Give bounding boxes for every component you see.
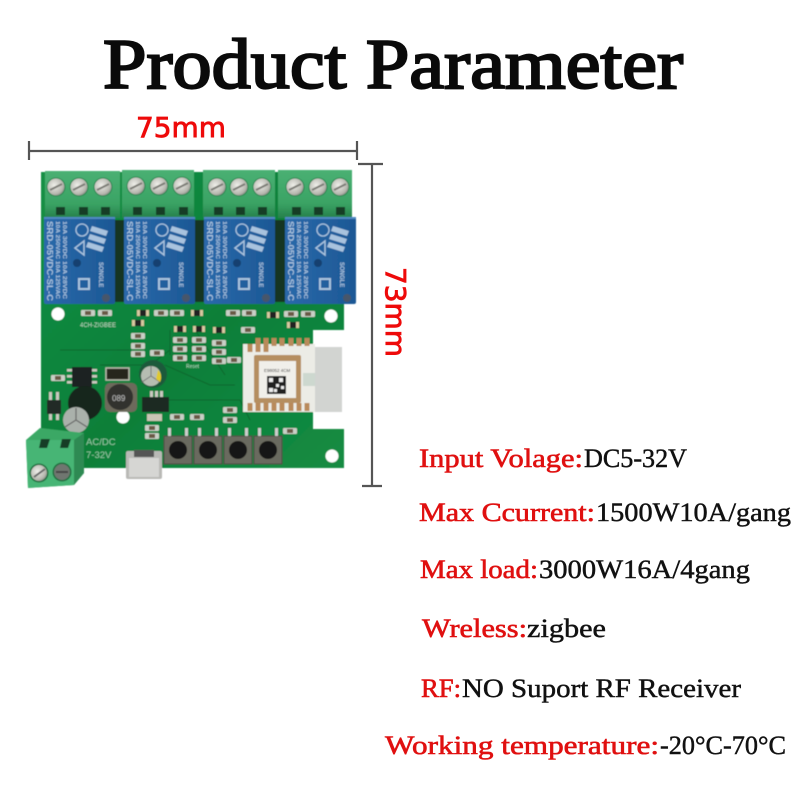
ICs and inductors xyxy=(47,367,169,421)
power terminal block xyxy=(26,428,84,488)
Zigbee module xyxy=(243,338,342,412)
PCB silk text: 4CH-ZIGBEE xyxy=(80,323,116,329)
spec: max current: Max Ccurrent: xyxy=(419,498,595,527)
silk voltage label: AC/DC xyxy=(86,437,116,448)
spec: max current xyxy=(419,498,791,527)
width dimension label: 75mm xyxy=(136,111,226,144)
silk voltage label xyxy=(86,437,116,461)
spec: working temperature xyxy=(385,731,786,760)
circuit board photo xyxy=(26,170,356,488)
silk reset label: Reset xyxy=(186,364,200,370)
height dimension arrow xyxy=(358,164,383,486)
ICs and inductors: 089 xyxy=(112,394,126,403)
PCB traces xyxy=(60,330,250,420)
spec: max load xyxy=(420,555,750,584)
spec: working temperature: Working temperature: xyxy=(385,731,659,760)
spec: wireless: zigbee xyxy=(527,614,606,643)
spec: input voltage xyxy=(419,444,687,473)
spec: RF: NO Suport RF Receiver xyxy=(462,674,741,703)
spec: RF: RF: xyxy=(421,674,461,703)
spec: input voltage: Input Volage: xyxy=(419,444,583,473)
title: Product Parameter xyxy=(103,26,683,104)
green PCB xyxy=(41,172,344,468)
width dimension arrow xyxy=(29,141,357,160)
mounting holes xyxy=(52,308,338,462)
tactile buttons xyxy=(164,428,282,464)
blue relays xyxy=(44,217,356,304)
micro USB port xyxy=(126,450,162,479)
small components xyxy=(51,310,315,439)
spec: max load: 3000W16A/4gang xyxy=(539,555,750,584)
Zigbee module: E98052 4CM xyxy=(264,368,291,373)
spec: max current: 1500W10A/gang xyxy=(596,498,791,527)
height dimension label: 73mm xyxy=(379,267,412,357)
green terminal blocks xyxy=(45,170,352,218)
spec: max load: Max load: xyxy=(420,555,538,584)
silk voltage label: 7-32V xyxy=(86,450,112,461)
spec: input voltage: DC5-32V xyxy=(584,444,687,473)
electrolytic capacitors xyxy=(63,360,167,433)
spec: wireless xyxy=(422,614,606,643)
spec: wireless: Wreless: xyxy=(422,614,527,643)
spec: working temperature: -20°C-70°C xyxy=(660,731,786,760)
